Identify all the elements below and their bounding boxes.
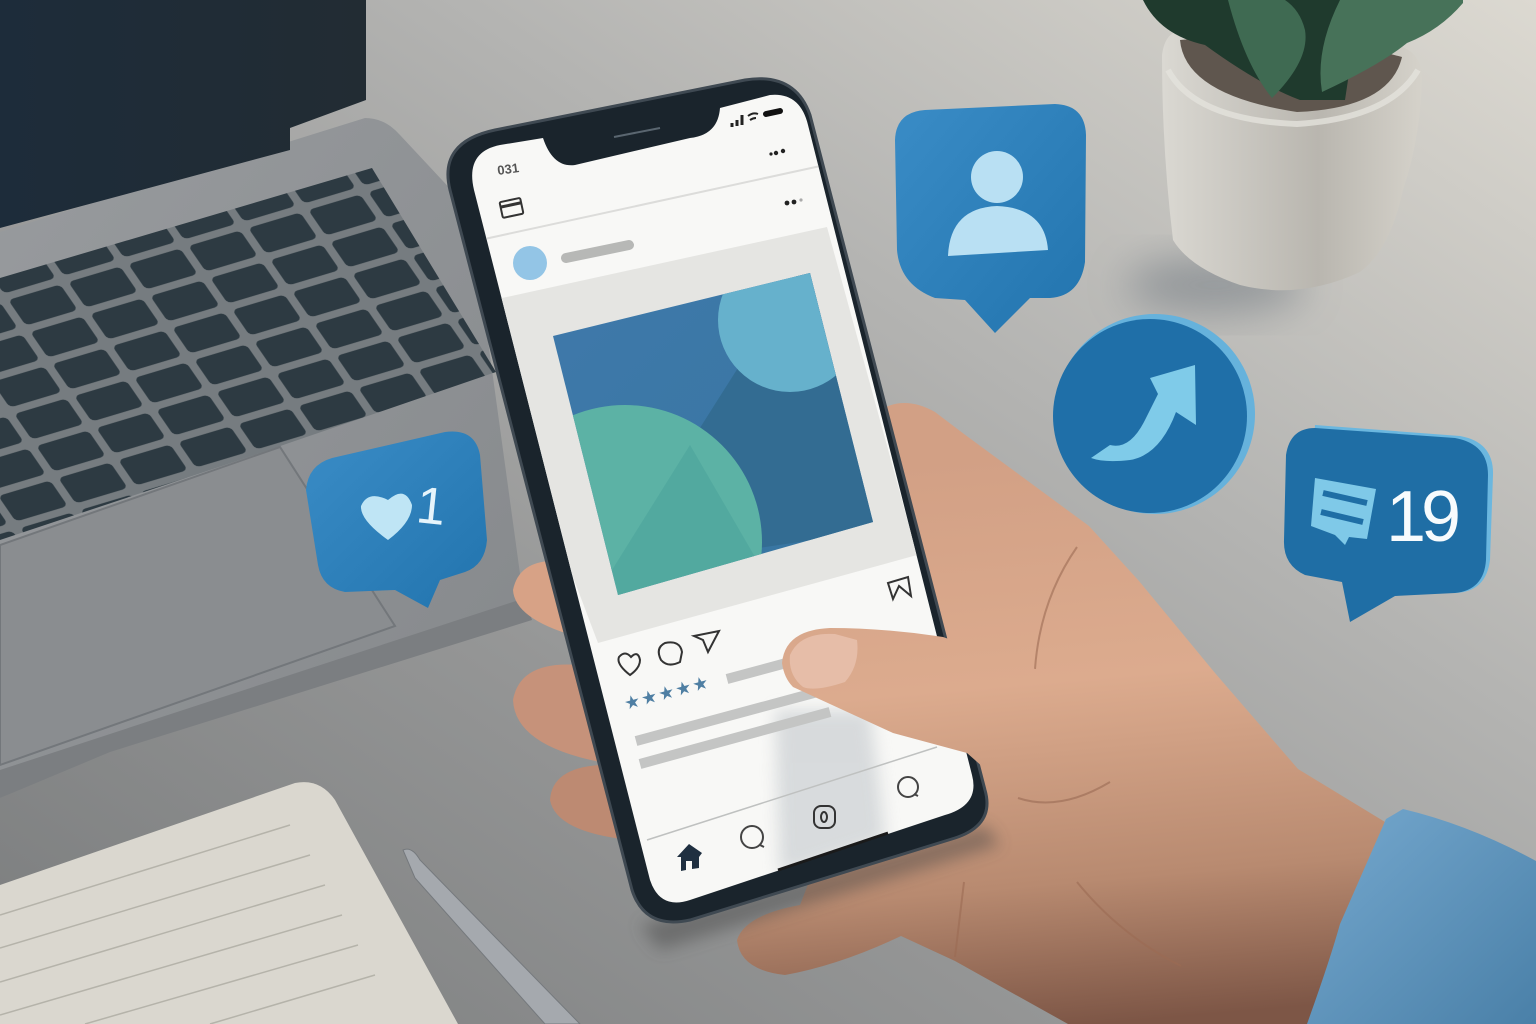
- laptop body: [0, 118, 525, 798]
- finger shadow on screen: [775, 710, 885, 875]
- status icons: [732, 111, 780, 127]
- gray post band: [470, 227, 917, 643]
- circle edge: [1055, 314, 1255, 514]
- avatar: [513, 246, 547, 280]
- trackpad: [0, 447, 395, 765]
- lower divider: [647, 747, 937, 840]
- green shade: [612, 446, 754, 595]
- count: 1: [414, 476, 449, 537]
- center leaf: [1228, 0, 1306, 98]
- pot shadow: [1125, 257, 1305, 313]
- wifi: [748, 113, 758, 120]
- phone screen: [472, 95, 973, 902]
- pot soil: [1180, 30, 1402, 112]
- laptop: [0, 0, 532, 798]
- nav profile: [898, 777, 918, 797]
- app tab icon: [500, 198, 523, 218]
- dots secondary: [785, 198, 803, 205]
- profile bubble: [895, 104, 1086, 333]
- notebook page: [0, 782, 458, 1024]
- phone body: [448, 79, 987, 922]
- post image: [553, 273, 873, 595]
- phone: [448, 79, 1000, 950]
- notebook lines: [0, 825, 375, 1024]
- image base: [553, 273, 873, 595]
- heart bubble: [306, 431, 487, 608]
- circle face: [1053, 319, 1247, 513]
- bookmark icon: [888, 577, 911, 599]
- dark back leaves: [1143, 0, 1360, 100]
- bubble body: [1284, 428, 1488, 622]
- sleeve: [1307, 809, 1536, 1024]
- menu dots top: [769, 149, 785, 156]
- notebook: [0, 782, 458, 1024]
- pot rim: [1168, 70, 1418, 124]
- comment bubble: [1284, 425, 1493, 622]
- battery: [766, 111, 780, 114]
- light blue circle: [718, 273, 836, 392]
- middle finger: [513, 664, 600, 762]
- arrow: [1091, 365, 1196, 461]
- nav search: [741, 826, 764, 848]
- keyboard: [0, 168, 496, 540]
- hand behind phone: [513, 403, 1390, 1024]
- bubble edge: [1310, 425, 1493, 593]
- pen: [403, 849, 580, 1024]
- plant leaves: [1143, 0, 1463, 100]
- caption bars: [636, 662, 830, 764]
- ring finger: [550, 765, 630, 840]
- thumb shape: [782, 628, 1160, 810]
- thumbnail: [790, 634, 858, 689]
- palm: [737, 403, 1390, 1024]
- green circle: [572, 405, 762, 595]
- phone shadow: [640, 825, 1000, 950]
- message icon: [1311, 478, 1376, 545]
- index finger: [513, 561, 590, 640]
- plant pot: [1125, 0, 1463, 313]
- rating stars: ★★★★★: [622, 672, 712, 714]
- comment icon: [659, 642, 682, 665]
- count: 19: [1386, 477, 1458, 557]
- nav reels: [814, 806, 835, 828]
- laptop front edge: [0, 598, 532, 798]
- signal: [732, 115, 742, 127]
- bubble body: [895, 104, 1086, 333]
- person head: [971, 151, 1023, 203]
- send icon: [694, 631, 719, 652]
- thumb crease: [1018, 782, 1110, 802]
- like icon: [618, 654, 640, 675]
- laptop screen: [0, 0, 366, 228]
- message lines: [1321, 493, 1367, 522]
- pot body: [1162, 30, 1422, 290]
- time: 031: [496, 160, 520, 178]
- top divider: [480, 165, 825, 240]
- heart: [361, 494, 412, 540]
- home indicator: [778, 833, 888, 870]
- speaker: [614, 128, 660, 137]
- right leaf: [1320, 0, 1463, 92]
- thumb: [782, 628, 1160, 810]
- nav home: [677, 844, 702, 871]
- username bar: [566, 245, 629, 258]
- palm creases: [955, 547, 1181, 966]
- bubble body: [306, 431, 487, 608]
- screen content: [470, 165, 937, 875]
- person shoulders: [948, 206, 1048, 256]
- dark triangle: [610, 270, 880, 570]
- share circle: [1053, 314, 1255, 514]
